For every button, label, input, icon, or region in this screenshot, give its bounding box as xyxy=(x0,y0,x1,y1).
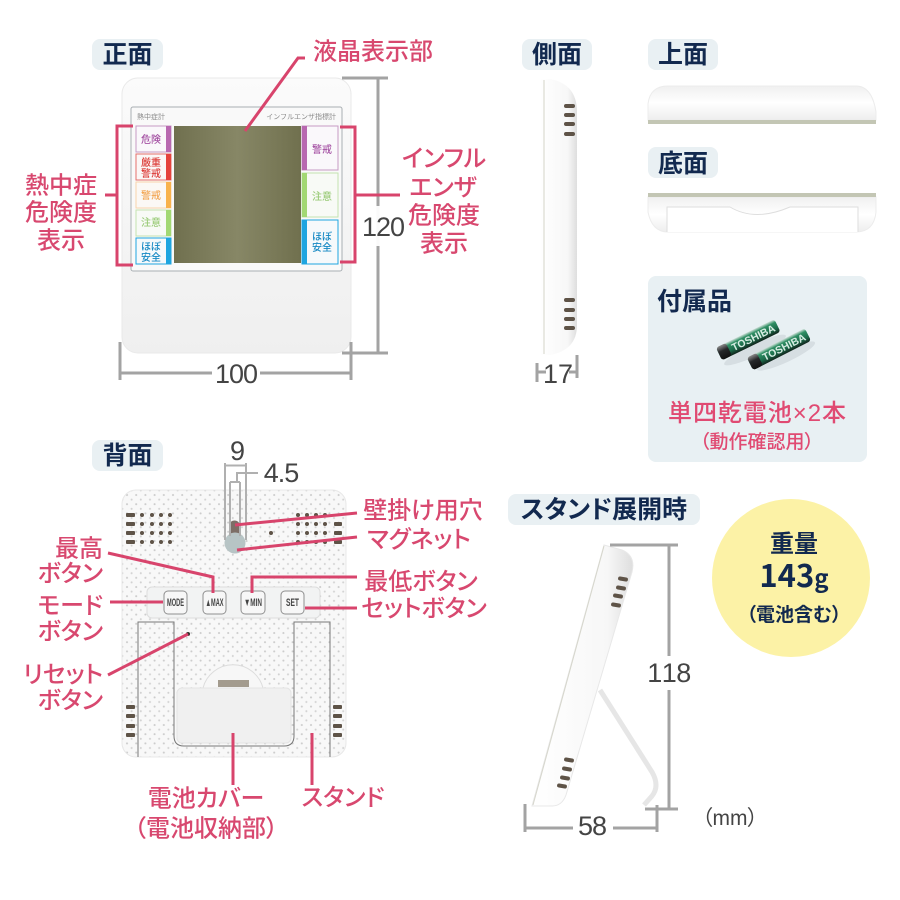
label: heatstroke risk display: 表示 xyxy=(37,228,85,254)
label: influenza risk display: 危険度 xyxy=(408,202,480,230)
label: battery cover: 電池カバー xyxy=(148,786,264,812)
dimension: stand height 118 xyxy=(610,545,691,809)
vents xyxy=(557,576,628,789)
magnet xyxy=(224,532,246,554)
label: influenza risk display: 表示 xyxy=(420,230,468,258)
dimension: height 120: 120 xyxy=(362,212,404,242)
dimension: stand height 118: 118 xyxy=(647,658,691,688)
wall-mount hole xyxy=(229,520,240,536)
arrow: wall hole xyxy=(235,513,357,525)
LCD screen xyxy=(174,126,301,263)
dimension: depth 17 xyxy=(537,355,577,389)
arrow: stand xyxy=(310,733,314,785)
label: set button: セットボタン xyxy=(361,596,487,622)
dimension: hole 9 and 4.5: 9 xyxy=(230,436,244,466)
panel: accessories: （動作確認用） xyxy=(700,431,814,453)
label: reset button: ボタン xyxy=(38,688,103,714)
label: influenza risk display: エンザ xyxy=(409,174,478,202)
right indicators: ほぼ xyxy=(312,231,332,243)
label: heatstroke risk display xyxy=(25,172,97,254)
stand leg xyxy=(600,690,656,805)
left indicators: 注意 xyxy=(141,216,161,229)
heading: side view: 側面 xyxy=(532,41,582,69)
label: max button xyxy=(38,536,103,588)
reset hole xyxy=(186,632,190,636)
panel: accessories xyxy=(648,276,867,462)
left indicators xyxy=(136,126,171,264)
arrow: magnet xyxy=(237,537,357,550)
bottom view device xyxy=(648,193,876,232)
label: battery cover xyxy=(134,786,278,842)
label: reset button: リセット xyxy=(23,662,103,688)
buttons: ▼MIN xyxy=(244,597,262,609)
callout: weight: 重量 xyxy=(770,531,818,558)
arrow: max button xyxy=(108,553,213,593)
callout: weight: （電池含む） xyxy=(746,604,842,626)
button strip xyxy=(147,587,320,618)
dimension: width 100: 100 xyxy=(215,359,257,389)
vents xyxy=(126,513,342,737)
left indicators: 安全 xyxy=(141,251,161,264)
label: mode button: モード xyxy=(38,592,103,620)
unit label: （mm） xyxy=(702,807,758,830)
front device xyxy=(122,78,351,353)
heading: top view: 上面 xyxy=(658,41,708,69)
bracket: influenza indicators xyxy=(340,127,400,262)
label: LCD display: 液晶表示部 xyxy=(313,38,433,66)
buttons xyxy=(164,591,304,614)
label: mode button: ボタン xyxy=(38,618,103,646)
label: min button: 最低ボタン xyxy=(364,568,478,596)
accessories text: 単四乾電池×2本 xyxy=(668,400,846,427)
callout: weight: 143g xyxy=(759,551,829,596)
buttons: SET xyxy=(286,597,299,609)
left indicators: 警戒 xyxy=(141,189,161,202)
label: influenza risk display xyxy=(402,146,486,258)
right indicators xyxy=(302,126,338,264)
heading: front view xyxy=(92,39,163,70)
dimension: depth 17: 17 xyxy=(543,359,573,389)
arrow: LCD label pointer xyxy=(245,58,305,131)
top view device xyxy=(648,86,876,124)
icon: AAA batteries: TOSHIBA xyxy=(761,331,808,364)
heading: bottom view: 底面 xyxy=(658,150,708,178)
icon: AAA batteries: TOSHIBA xyxy=(730,322,778,354)
label: heatstroke risk display: 危険度 xyxy=(25,200,97,226)
icon: AAA batteries xyxy=(716,319,818,375)
arrow: reset button xyxy=(108,634,188,675)
left indicators: 警戒 xyxy=(141,167,161,180)
right indicators: 警戒 xyxy=(312,143,332,156)
dimension: width 100 xyxy=(120,342,351,389)
dimension: stand depth 58: 58 xyxy=(578,811,606,841)
label: heatstroke risk display: 熱中症 xyxy=(25,172,97,200)
left indicators: 厳重 xyxy=(141,156,161,169)
heading: back view: 背面 xyxy=(102,442,153,470)
panel captions: インフルエンザ指標計 xyxy=(266,112,336,121)
label: reset button xyxy=(23,662,103,714)
buttons: MODE xyxy=(167,597,184,609)
arrow: min button xyxy=(252,577,357,593)
dimension: hole 9 and 4.5: 4.5 xyxy=(264,458,298,488)
body xyxy=(532,545,633,806)
label: battery cover: （電池収納部） xyxy=(134,816,278,842)
arrow: set button xyxy=(305,606,357,610)
buttons: ▲MAX xyxy=(206,597,224,609)
heading: bottom view xyxy=(648,147,718,178)
label: influenza risk display: インフル xyxy=(402,146,486,172)
stand-open device xyxy=(532,545,656,806)
arrow: battery cover xyxy=(232,733,234,785)
label: mode button xyxy=(38,592,103,646)
bracket: heatstroke indicators xyxy=(105,126,133,265)
vents xyxy=(564,104,575,330)
heading: front view: 正面 xyxy=(102,41,153,69)
callout: weight xyxy=(712,499,870,657)
left indicators: ほぼ xyxy=(141,241,161,253)
right indicators: 安全 xyxy=(312,241,332,254)
heading: top view xyxy=(648,39,718,70)
heading: back view xyxy=(92,440,163,471)
label: max button: 最高 xyxy=(55,536,103,562)
back device xyxy=(122,490,346,757)
label: wall mount hole: 壁掛け用穴 xyxy=(363,498,483,524)
dimension: hole 9 and 4.5 xyxy=(225,436,298,540)
label: stand: スタンド xyxy=(302,784,385,812)
left indicators: 危険 xyxy=(141,133,161,146)
label panel xyxy=(131,107,342,271)
side device xyxy=(540,79,577,355)
panel captions xyxy=(137,112,336,121)
dimension: stand depth 58 xyxy=(525,804,657,842)
stand outlines xyxy=(138,622,330,757)
stand hinge xyxy=(203,665,263,688)
label: max button: ボタン xyxy=(38,560,103,588)
arrow: mode button xyxy=(110,600,163,604)
accessories heading: 付属品 xyxy=(657,288,732,316)
battery cover xyxy=(177,688,291,743)
label: magnet: マグネット xyxy=(367,526,471,554)
heading: stand open view: スタンド展開時 xyxy=(521,496,687,524)
panel captions: 熱中症計 xyxy=(137,112,165,121)
right indicators: 注意 xyxy=(312,190,332,203)
heading: side view xyxy=(522,39,592,70)
dimension: height 120 xyxy=(342,78,404,353)
